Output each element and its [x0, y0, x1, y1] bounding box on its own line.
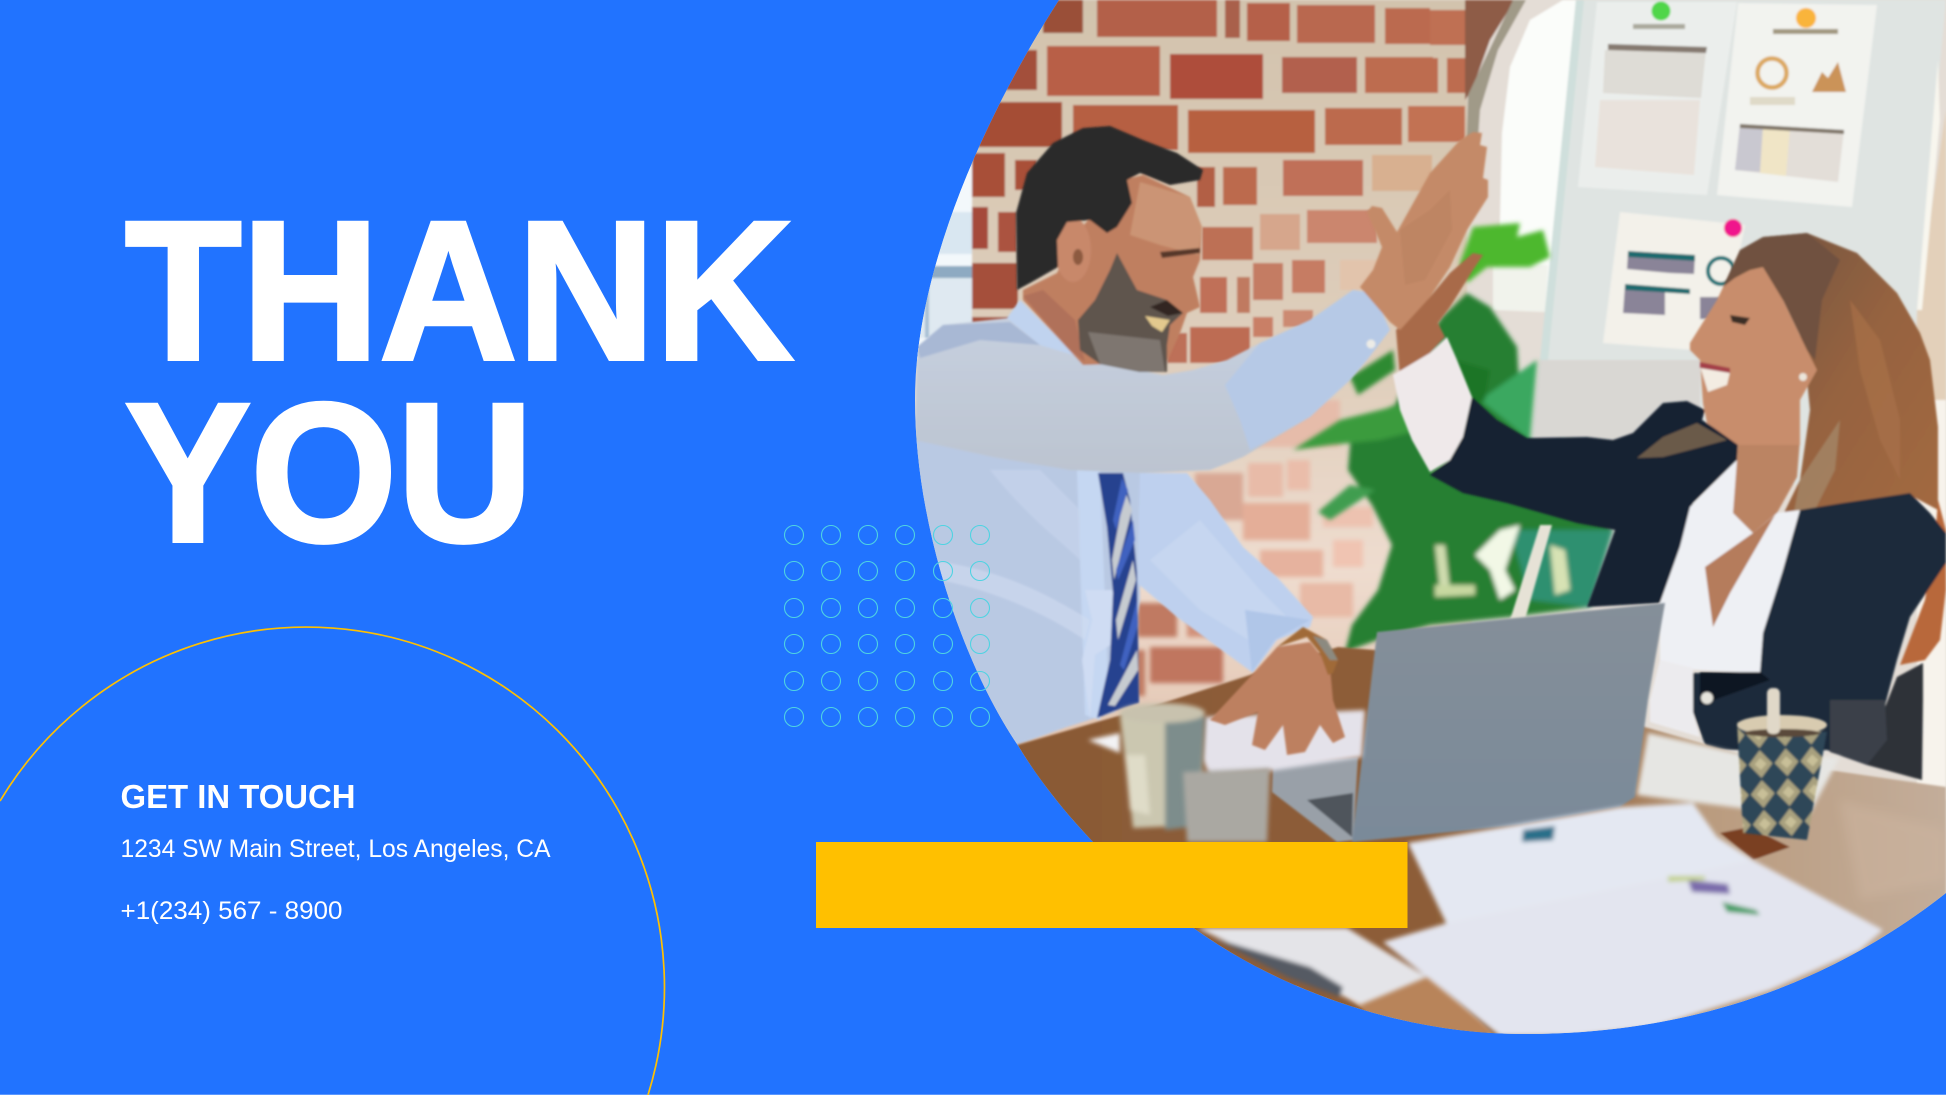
- man: neck and face: [1023, 175, 1202, 372]
- man: hair: [1016, 126, 1203, 290]
- papers: [1088, 710, 1883, 1036]
- photo: two colleagues high-fiving at a meeting table: [900, 0, 1946, 1095]
- yellow accent bar: [816, 842, 1408, 928]
- contact block: [120, 778, 551, 925]
- woman: long hair: [1723, 233, 1946, 665]
- brick wall, upper: [972, 0, 1472, 760]
- yellow circle outline: [0, 627, 664, 1095]
- brick wall, lower and out of focus: [1137, 400, 1373, 696]
- man: tie: [1097, 473, 1139, 718]
- title: THANK YOU: [125, 180, 793, 583]
- wall strip at right: [1917, 60, 1946, 800]
- woman: jacket right side: [1693, 493, 1946, 765]
- poster 2: [1717, 3, 1877, 207]
- woman: blouse: [1660, 460, 1800, 673]
- woman: hand behind: [1396, 253, 1483, 378]
- poster 3: [1603, 212, 1745, 352]
- pins: [1652, 2, 1816, 237]
- man: body shirt: [915, 430, 1140, 745]
- man: second sleeve: [1137, 473, 1313, 673]
- address: 1234 SW Main Street, Los Angeles, CA: [120, 835, 551, 863]
- title: THANK YOU: THANK: [125, 180, 793, 401]
- background scene: [905, 0, 1946, 800]
- man: raised arm: [915, 290, 1390, 473]
- woman: shoulder hair strand: [1637, 423, 1727, 458]
- glass: [1183, 768, 1270, 842]
- table: [1017, 646, 1946, 1034]
- woman: face: [1690, 267, 1817, 445]
- dot grid: [784, 526, 990, 726]
- woman: front of hair: [1723, 233, 1840, 360]
- plant stem: [1510, 525, 1552, 620]
- man: raised hand: [1360, 132, 1488, 330]
- whiteboard: [1530, 0, 1946, 500]
- contact heading: GET IN TOUCH: [120, 778, 356, 815]
- mug right: [1737, 688, 1827, 840]
- laptop: [1272, 603, 1665, 842]
- woman: white sleeve: [1393, 337, 1472, 472]
- arch wall and window: [1463, 0, 1576, 312]
- woman: neck and chest: [1733, 440, 1800, 533]
- phone: +1(234) 567 - 8900: [120, 897, 342, 925]
- left window: [917, 159, 974, 360]
- woman: jacket arm and torso: [1430, 397, 1738, 607]
- plant: [1293, 223, 1613, 652]
- woman: chest opening: [1705, 515, 1775, 627]
- chair: [1867, 663, 1923, 780]
- people: [915, 126, 1946, 780]
- woman: shirt cuff: [1650, 660, 1700, 737]
- poster 1: [1578, 2, 1737, 195]
- title: THANK YOU: YOU: [125, 362, 533, 583]
- mug left: [1119, 703, 1205, 830]
- man: hand on table with watch: [1210, 627, 1345, 755]
